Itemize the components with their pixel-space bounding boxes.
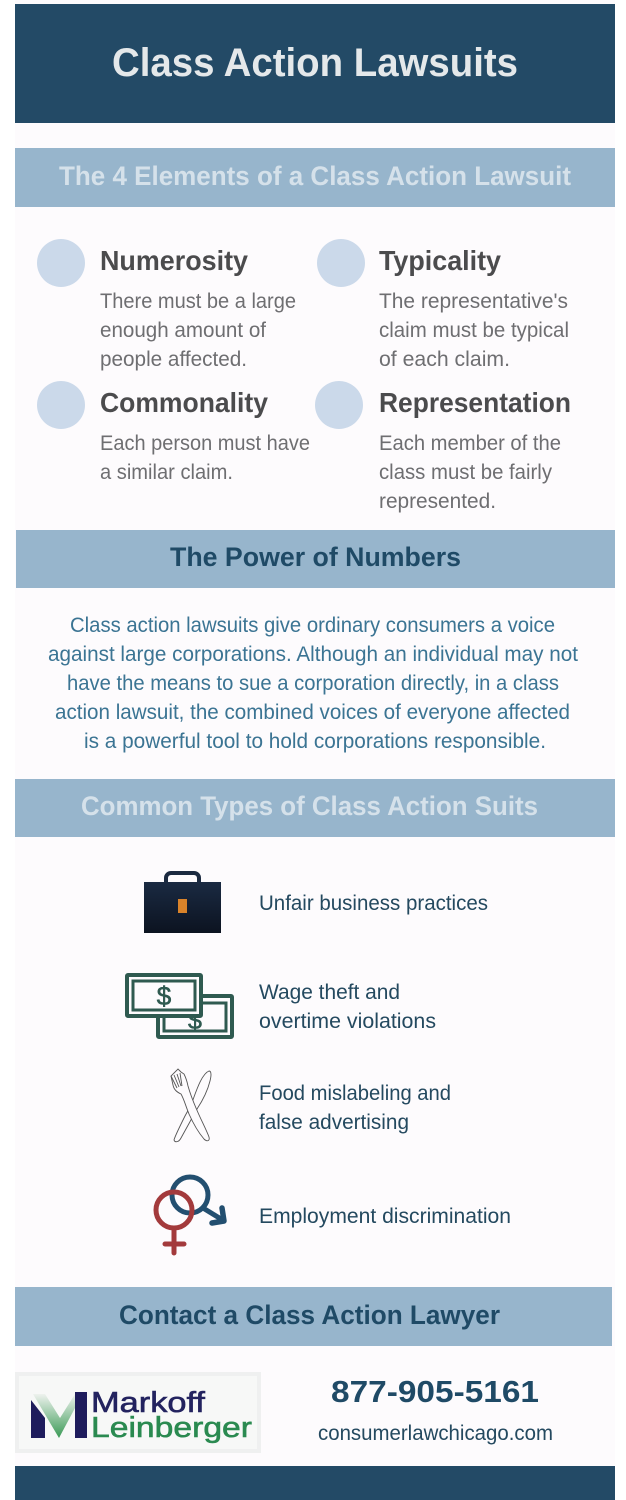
icon: money: $ xyxy=(188,1007,202,1035)
heading: contact: Contact a Class Action Lawyer xyxy=(119,1300,500,1330)
paragraph: have the means to sue a corporation directly, in a class xyxy=(67,672,559,695)
logo: Markoff Leinberger: Markoff xyxy=(91,1387,206,1419)
element: typicality: of each claim. xyxy=(379,348,510,371)
icon: money: $ xyxy=(157,981,172,1011)
panel: the 4 elements xyxy=(15,148,615,513)
logo: Markoff Leinberger xyxy=(15,1372,261,1453)
panel: common types xyxy=(15,779,615,1253)
element: representation xyxy=(315,381,571,513)
icon: money xyxy=(127,975,232,1037)
heading: the power of numbers xyxy=(16,530,615,588)
footer band xyxy=(15,1466,615,1500)
element: numerosity: Numerosity xyxy=(100,245,248,276)
element: representation: Each member of the xyxy=(379,432,561,455)
panel: the power of numbers xyxy=(16,530,615,753)
element: numerosity: enough amount of xyxy=(100,319,266,342)
panel: contact xyxy=(15,1287,612,1453)
element: commonality: a similar claim. xyxy=(100,461,233,484)
paragraph: is a powerful tool to hold corporations responsible. xyxy=(84,730,546,753)
label: unfair business practices: Unfair business practices xyxy=(259,892,488,915)
element: commonality: Commonality xyxy=(100,387,268,418)
label: food mislabeling: Food mislabeling and xyxy=(259,1082,451,1105)
element: commonality xyxy=(37,381,310,484)
heading: the power of numbers: The Power of Numbers xyxy=(170,542,461,572)
element: numerosity: people affected. xyxy=(100,348,247,371)
paragraph: action lawsuit, the combined voices of everyone affected xyxy=(55,701,570,724)
heading: common types xyxy=(15,779,615,837)
logo: Markoff Leinberger: Leinberger xyxy=(91,1412,252,1444)
label: wage theft: Wage theft and xyxy=(259,981,400,1004)
heading: the 4 elements: The 4 Elements of a Class Action Lawsuit xyxy=(59,161,571,191)
label: wage theft xyxy=(259,981,436,1033)
phone number: 877-905-5161 xyxy=(331,1374,539,1409)
label: employment discrimination: Employment discrimination xyxy=(259,1205,511,1228)
element: representation: Representation xyxy=(379,387,571,418)
element: typicality: claim must be typical xyxy=(379,319,569,342)
heading: common types: Common Types of Class Action Suits xyxy=(81,791,538,821)
paragraph xyxy=(48,614,578,753)
element: typicality xyxy=(317,239,569,371)
element: typicality: Typicality xyxy=(379,245,501,276)
label: food mislabeling xyxy=(259,1082,451,1134)
heading: contact xyxy=(15,1287,612,1346)
icon: fork and knife xyxy=(171,1069,211,1142)
icon: gender symbols xyxy=(156,1177,224,1253)
label: food mislabeling: false advertising xyxy=(259,1111,409,1134)
paragraph: Class action lawsuits give ordinary consumers a voice xyxy=(70,614,555,637)
element: numerosity: There must be a large xyxy=(100,290,296,313)
paragraph: against large corporations. Although an individual may not xyxy=(48,643,578,666)
icon: briefcase xyxy=(144,873,221,933)
element: numerosity xyxy=(37,239,296,371)
title: Class Action Lawsuits xyxy=(112,41,518,85)
title banner xyxy=(15,4,615,123)
element: typicality: The representative's xyxy=(379,290,568,313)
element: representation: represented. xyxy=(379,490,496,513)
element: representation: class must be fairly xyxy=(379,461,552,484)
website: consumerlawchicago.com xyxy=(318,1422,553,1445)
element: commonality: Each person must have xyxy=(100,432,310,455)
label: wage theft: overtime violations xyxy=(259,1010,436,1033)
heading: the 4 elements xyxy=(15,148,615,207)
